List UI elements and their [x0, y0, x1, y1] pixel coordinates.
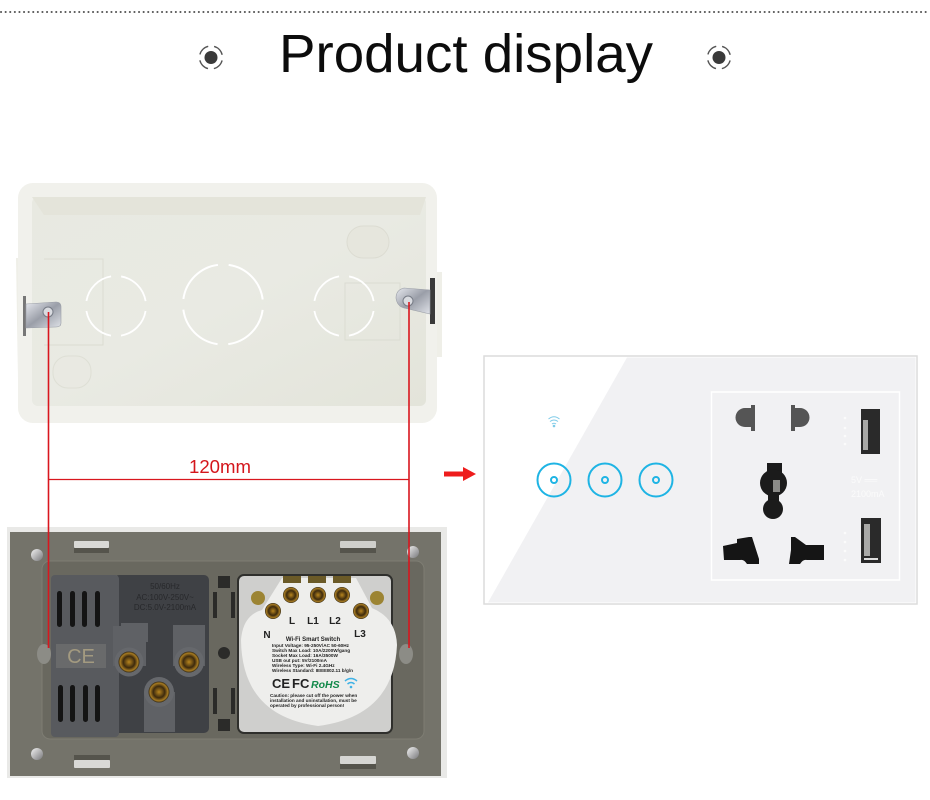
plate inner recess	[42, 561, 424, 739]
clips: top and bottom	[74, 541, 109, 548]
touch button 3	[640, 464, 672, 496]
dotted top divider	[1, 11, 930, 13]
panel: switch back plate	[7, 527, 447, 778]
USB indicator dots	[844, 417, 846, 561]
terminal labels: L3	[354, 629, 366, 640]
socket module: DC:5.0V-2100mA	[134, 603, 197, 612]
caution text: installation and uninstallation, must be	[270, 698, 357, 703]
plate gray body	[10, 532, 441, 776]
terminal labels: L1	[307, 616, 319, 627]
socket plate outline	[712, 392, 900, 580]
oval plug: top right	[347, 226, 389, 258]
terminal: bottom	[144, 677, 175, 732]
icon: right title bullet	[708, 46, 730, 69]
terminal labels: N	[263, 630, 271, 641]
socket module: CE	[67, 646, 95, 668]
spec lines: Input Voltage: 95-250V/AC 50-60Hz	[272, 643, 350, 648]
touch button 1	[538, 464, 570, 496]
oval plug: bottom left	[53, 356, 91, 388]
spec lines: Wireless Standard: IEEE802.11 b/g/n	[272, 668, 353, 673]
faint inner squares	[44, 259, 103, 345]
switch module: RoHS	[311, 679, 340, 691]
USB rating text	[851, 475, 885, 499]
left metal clip	[23, 296, 26, 336]
glass diagonal shade	[488, 358, 916, 602]
spec lines	[272, 643, 353, 673]
centre strip	[213, 576, 235, 731]
knockout: centre	[183, 264, 263, 344]
USB rating text: 2100mA	[851, 489, 885, 499]
terminal: left	[113, 623, 148, 676]
ratings text: 50/60Hz	[150, 582, 180, 591]
dimension label: 120mm	[189, 456, 251, 477]
white label disc	[241, 578, 397, 726]
terminal: right	[173, 625, 205, 677]
terminal labels: L2	[329, 616, 341, 627]
side ears	[16, 258, 32, 378]
title: Product display	[279, 24, 653, 84]
caution text	[270, 693, 357, 708]
USB rating text: 5V ══	[851, 475, 878, 485]
box inner cavity	[32, 197, 426, 406]
caution text: operated by professional person!	[270, 703, 345, 708]
socket module	[51, 575, 209, 737]
ventilation slots	[57, 591, 100, 722]
panel: mounting box	[16, 183, 442, 423]
certification marks: CE	[272, 676, 290, 691]
terminal labels: L	[289, 616, 295, 627]
corner studs	[31, 549, 43, 561]
USB port bottom	[861, 518, 881, 563]
icon: left title bullet	[200, 46, 222, 69]
spec lines: Socket Max Load: 16A/3500W	[272, 653, 338, 658]
terminal labels	[263, 616, 366, 641]
icon: wifi	[548, 417, 560, 427]
arrow: to front view	[444, 467, 476, 481]
side mounting holes	[37, 644, 51, 664]
spec lines: Switch Max Load: 10A/2200W/gang	[272, 648, 350, 653]
USB port top	[861, 409, 880, 454]
caution text: Caution: please cut off the power when	[270, 693, 357, 698]
red measurement lines	[48, 302, 409, 648]
spec lines: Wireless Type: Wi-Fi 2.4GHz	[272, 663, 335, 668]
right metal clip	[430, 278, 435, 324]
label heading: Wi-Fi Smart Switch	[286, 637, 340, 643]
box outer rim	[18, 183, 437, 423]
plate white edge	[7, 527, 447, 778]
screw terminals	[283, 587, 299, 603]
switch module: FC	[292, 676, 310, 691]
switch module	[238, 575, 397, 733]
touch button 2	[588, 464, 622, 496]
spec lines: USB out put: 5V/2100mA	[272, 658, 328, 663]
panel: front view switch	[484, 356, 917, 604]
knockout: right	[314, 276, 374, 336]
socket pin holes	[723, 405, 824, 564]
CE label	[56, 644, 106, 668]
knockout: left	[86, 276, 146, 336]
socket module: AC:100V-250V~	[136, 593, 194, 602]
glass frame	[484, 356, 917, 604]
